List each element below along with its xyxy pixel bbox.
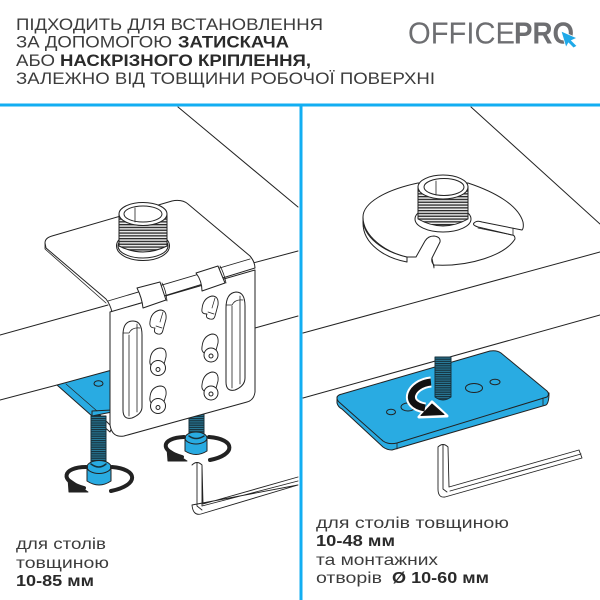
slotted disc [363, 183, 523, 268]
table edges right [303, 107, 600, 398]
slots [123, 292, 245, 418]
heading: ЗАЛЕЖНО ВІД ТОВЩИНИ РОБОЧОЇ ПОВЕРХНІ [16, 69, 435, 88]
clamp top plate [45, 200, 255, 312]
caption: through-mount thickness [316, 515, 509, 587]
caption: through-mount thickness: 10-48 мм [316, 533, 395, 550]
threaded bolt through plate [435, 357, 451, 400]
screws [150, 348, 218, 414]
threaded collar right [415, 175, 471, 232]
panel: through-mount installation [303, 107, 600, 497]
hex key right [438, 444, 582, 497]
caption: clamp thickness: товщиною [16, 555, 109, 572]
caption: clamp thickness: 10-85 мм [16, 573, 94, 590]
heading: ЗАТИСКАЧА [178, 32, 289, 52]
mounting holes [386, 409, 396, 415]
caption: through-mount thickness: отворів [316, 570, 382, 587]
threaded collar left [116, 202, 170, 260]
rotation arrow right [166, 437, 229, 461]
logo: OfficePro: PRO [514, 16, 574, 50]
rotation arrow left [67, 467, 132, 492]
hinge tabs [137, 266, 226, 308]
icon: logo cursor [561, 31, 577, 48]
hex key left [192, 462, 298, 514]
blue plate under table left [57, 370, 112, 432]
heading: ПІДХОДИТЬ ДЛЯ ВСТАНОВЛЕННЯ [16, 15, 323, 34]
bolt with nut right [185, 412, 207, 454]
clamp front plate [110, 270, 255, 436]
heading: ЗА ДОПОМОГОЮ [16, 32, 172, 52]
caption: through-mount thickness: Ø 10-60 мм [392, 570, 489, 587]
keyholes [150, 296, 218, 405]
caption: through-mount thickness: та монтажних [316, 552, 438, 569]
table edges left [0, 107, 298, 400]
logo: OfficePro: OFFICE [408, 16, 515, 50]
rotation arrow on plate [411, 382, 447, 417]
panel: clamp installation [0, 107, 298, 514]
caption: clamp thickness [16, 536, 109, 590]
caption: through-mount thickness: для столів товщиною [316, 515, 509, 532]
heading: АБО [16, 51, 55, 70]
logo: OfficePro [408, 16, 577, 50]
blue mounting plate [337, 351, 549, 450]
caption: clamp thickness: для столів [16, 536, 106, 553]
heading [16, 15, 435, 88]
heading: НАСКРІЗНОГО КРІПЛЕННЯ, [60, 51, 311, 70]
bolt with nut left [87, 416, 111, 485]
